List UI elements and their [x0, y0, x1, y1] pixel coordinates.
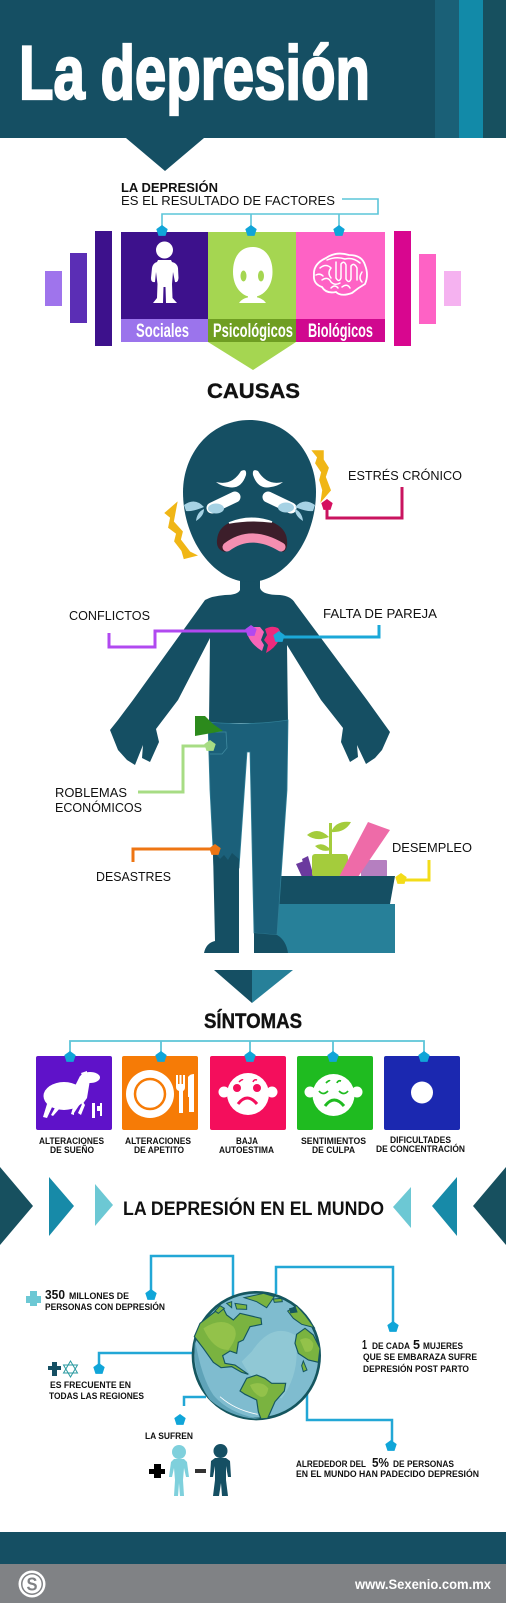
footer — [0, 1564, 506, 1603]
stat: 350 millones — [26, 1288, 165, 1313]
eyes — [212, 497, 291, 508]
icon: cross — [48, 1362, 61, 1376]
panel: alteraciones de apetito: ALTERACIONES — [125, 1136, 191, 1146]
stat: todas las regiones — [48, 1361, 144, 1402]
callout: estres cronico — [321, 468, 462, 518]
icon: minus sign — [195, 1469, 206, 1473]
pants — [208, 720, 288, 935]
icon: lightning right — [315, 452, 329, 497]
panel: sociales: Sociales — [136, 321, 189, 342]
south america — [240, 1375, 286, 1419]
footer band — [0, 1532, 506, 1564]
icon: plus — [26, 1291, 41, 1306]
stat: 1 de cada 5 mujeres: 5 — [413, 1338, 420, 1352]
panel: alteraciones de apetito: DE APETITO — [134, 1145, 184, 1155]
tears — [184, 501, 204, 521]
panel: baja autoestima: AUTOESTIMA — [219, 1145, 274, 1155]
stat: 1 de cada 5 mujeres: MUJERES — [423, 1341, 463, 1352]
greenland — [244, 1293, 274, 1308]
callout: desastres — [96, 844, 221, 884]
stat: todas las regiones: TODAS LAS REGIONES — [49, 1391, 144, 1402]
intro text: ES EL RESULTADO DE FACTORES — [121, 193, 335, 208]
panel: alteraciones de sueno: DE SUEÑO — [50, 1145, 94, 1155]
panel: sociales — [121, 232, 208, 342]
stat: la sufren: LA SUFREN — [145, 1431, 193, 1442]
mouth — [217, 519, 287, 552]
stat: 5 por ciento: 5% — [372, 1456, 389, 1470]
connectors: mundo — [99, 1256, 393, 1443]
callout: falta de pareja — [273, 606, 437, 642]
intro text — [121, 180, 335, 208]
panel: psicologicos: Psicológicos — [213, 321, 293, 342]
icon: person — [151, 242, 178, 303]
stat: 1 de cada 5 mujeres: DE CADA — [372, 1341, 410, 1352]
madagascar — [302, 1361, 307, 1372]
north america — [194, 1308, 262, 1374]
callout: desempleo: DESEMPLEO — [392, 840, 472, 855]
heading: causas: CAUSAS — [207, 379, 300, 403]
heading: la depresion en el mundo: LA DEPRESIÓN EN EL MUNDO — [123, 1196, 384, 1220]
panel: alteraciones de apetito — [122, 1051, 198, 1155]
stat: 1 de cada 5 mujeres: QUE SE EMBARAZA SUFRE — [363, 1352, 477, 1363]
arrows left — [0, 1167, 113, 1245]
callout: desempleo — [392, 840, 472, 884]
logo — [18, 1570, 46, 1598]
arctic islands — [215, 1302, 247, 1313]
stat: 350 millones: PERSONAS CON DEPRESIÓN — [45, 1301, 165, 1313]
africa — [295, 1328, 320, 1362]
icon: dot — [411, 1082, 433, 1104]
callout: problemas economicos — [55, 740, 216, 815]
stat: 5 por ciento: EN EL MUNDO HAN PADECIDO DEPRESIÓN — [296, 1468, 479, 1480]
panel: biologicos — [296, 232, 385, 342]
stat: 1 de cada 5 mujeres: DEPRESIÓN POST PARTO — [363, 1363, 469, 1375]
panel: dificultades de concentracion: DE CONCENTRACIÓN — [376, 1143, 465, 1154]
heading: sintomas: SÍNTOMAS — [204, 1008, 302, 1033]
callout: desastres: DESASTRES — [96, 869, 171, 884]
header banner — [0, 0, 506, 171]
connector: factores — [156, 199, 378, 236]
icon: broken heart — [248, 627, 281, 653]
panel: biologicos: Biológicos — [308, 321, 373, 342]
box with belongings — [277, 822, 395, 953]
icon: plate and cutlery — [126, 1070, 194, 1118]
connector: sintomas — [70, 1041, 424, 1056]
stat: 350 millones: 350 — [45, 1288, 65, 1302]
head — [183, 420, 316, 582]
panel: sentimientos de culpa: SENTIMIENTOS — [301, 1136, 366, 1146]
callout: estres cronico: ESTRÉS CRÓNICO — [348, 468, 462, 483]
icon: sheep — [43, 1071, 102, 1118]
stat: todas las regiones: ES FRECUENTE EN — [50, 1380, 131, 1391]
callout: problemas economicos: ROBLEMAS — [55, 785, 127, 800]
icon: plus sign — [149, 1464, 165, 1478]
stat: 1 de cada 5 mujeres: 1 — [362, 1338, 367, 1352]
callout: problemas economicos: ECONÓMICOS — [55, 800, 142, 815]
panel: sentimientos de culpa — [297, 1051, 373, 1155]
torn leg and shoes — [204, 851, 239, 953]
side bars left — [45, 231, 112, 346]
arrow: down — [214, 970, 293, 1003]
icon: head — [233, 247, 272, 303]
panel: dificultades de concentracion — [376, 1051, 465, 1154]
europe — [288, 1306, 314, 1328]
icon: guilty face — [304, 1074, 362, 1116]
logo: S — [26, 1574, 38, 1594]
stat: 1 de cada 5 mujeres — [362, 1321, 477, 1375]
panel: baja autoestima — [210, 1051, 286, 1155]
stat: 5 por ciento: DE PERSONAS — [393, 1459, 454, 1470]
icon: lightning left — [167, 506, 193, 557]
money — [195, 716, 223, 736]
panel: sentimientos de culpa: DE CULPA — [312, 1145, 355, 1155]
panel: dificultades de concentracion: DIFICULTADES — [390, 1135, 451, 1145]
icon: star of david — [64, 1361, 78, 1377]
panel: alteraciones de sueno — [36, 1051, 112, 1155]
panel: psicologicos — [208, 232, 296, 370]
footer: www.Sexenio.com.mx — [354, 1576, 491, 1592]
stat: 5 por ciento — [296, 1440, 479, 1480]
body and arms — [110, 575, 390, 765]
icon: brain — [314, 254, 367, 295]
callout: conflictos: CONFLICTOS — [69, 608, 150, 623]
panel: baja autoestima: BAJA — [236, 1136, 258, 1146]
stat: la sufren — [145, 1414, 231, 1496]
side bars right — [394, 231, 461, 346]
stat: 350 millones: MILLONES DE — [69, 1291, 129, 1302]
intro text: LA DEPRESIÓN — [121, 180, 218, 195]
icon: woman — [169, 1445, 189, 1496]
callout: conflictos — [69, 608, 257, 647]
globe — [193, 1292, 320, 1419]
eyebrows — [216, 470, 246, 488]
figure: crying person — [110, 420, 390, 953]
arrows right — [393, 1167, 506, 1245]
callout: falta de pareja: FALTA DE PAREJA — [323, 606, 437, 621]
icon: man — [210, 1444, 231, 1496]
title: La depresión — [19, 31, 370, 116]
panel: alteraciones de sueno: ALTERACIONES — [39, 1136, 104, 1146]
icon: sad face — [218, 1073, 278, 1115]
stat: 5 por ciento: ALREDEDOR DEL — [296, 1459, 366, 1470]
pocket — [208, 732, 227, 754]
